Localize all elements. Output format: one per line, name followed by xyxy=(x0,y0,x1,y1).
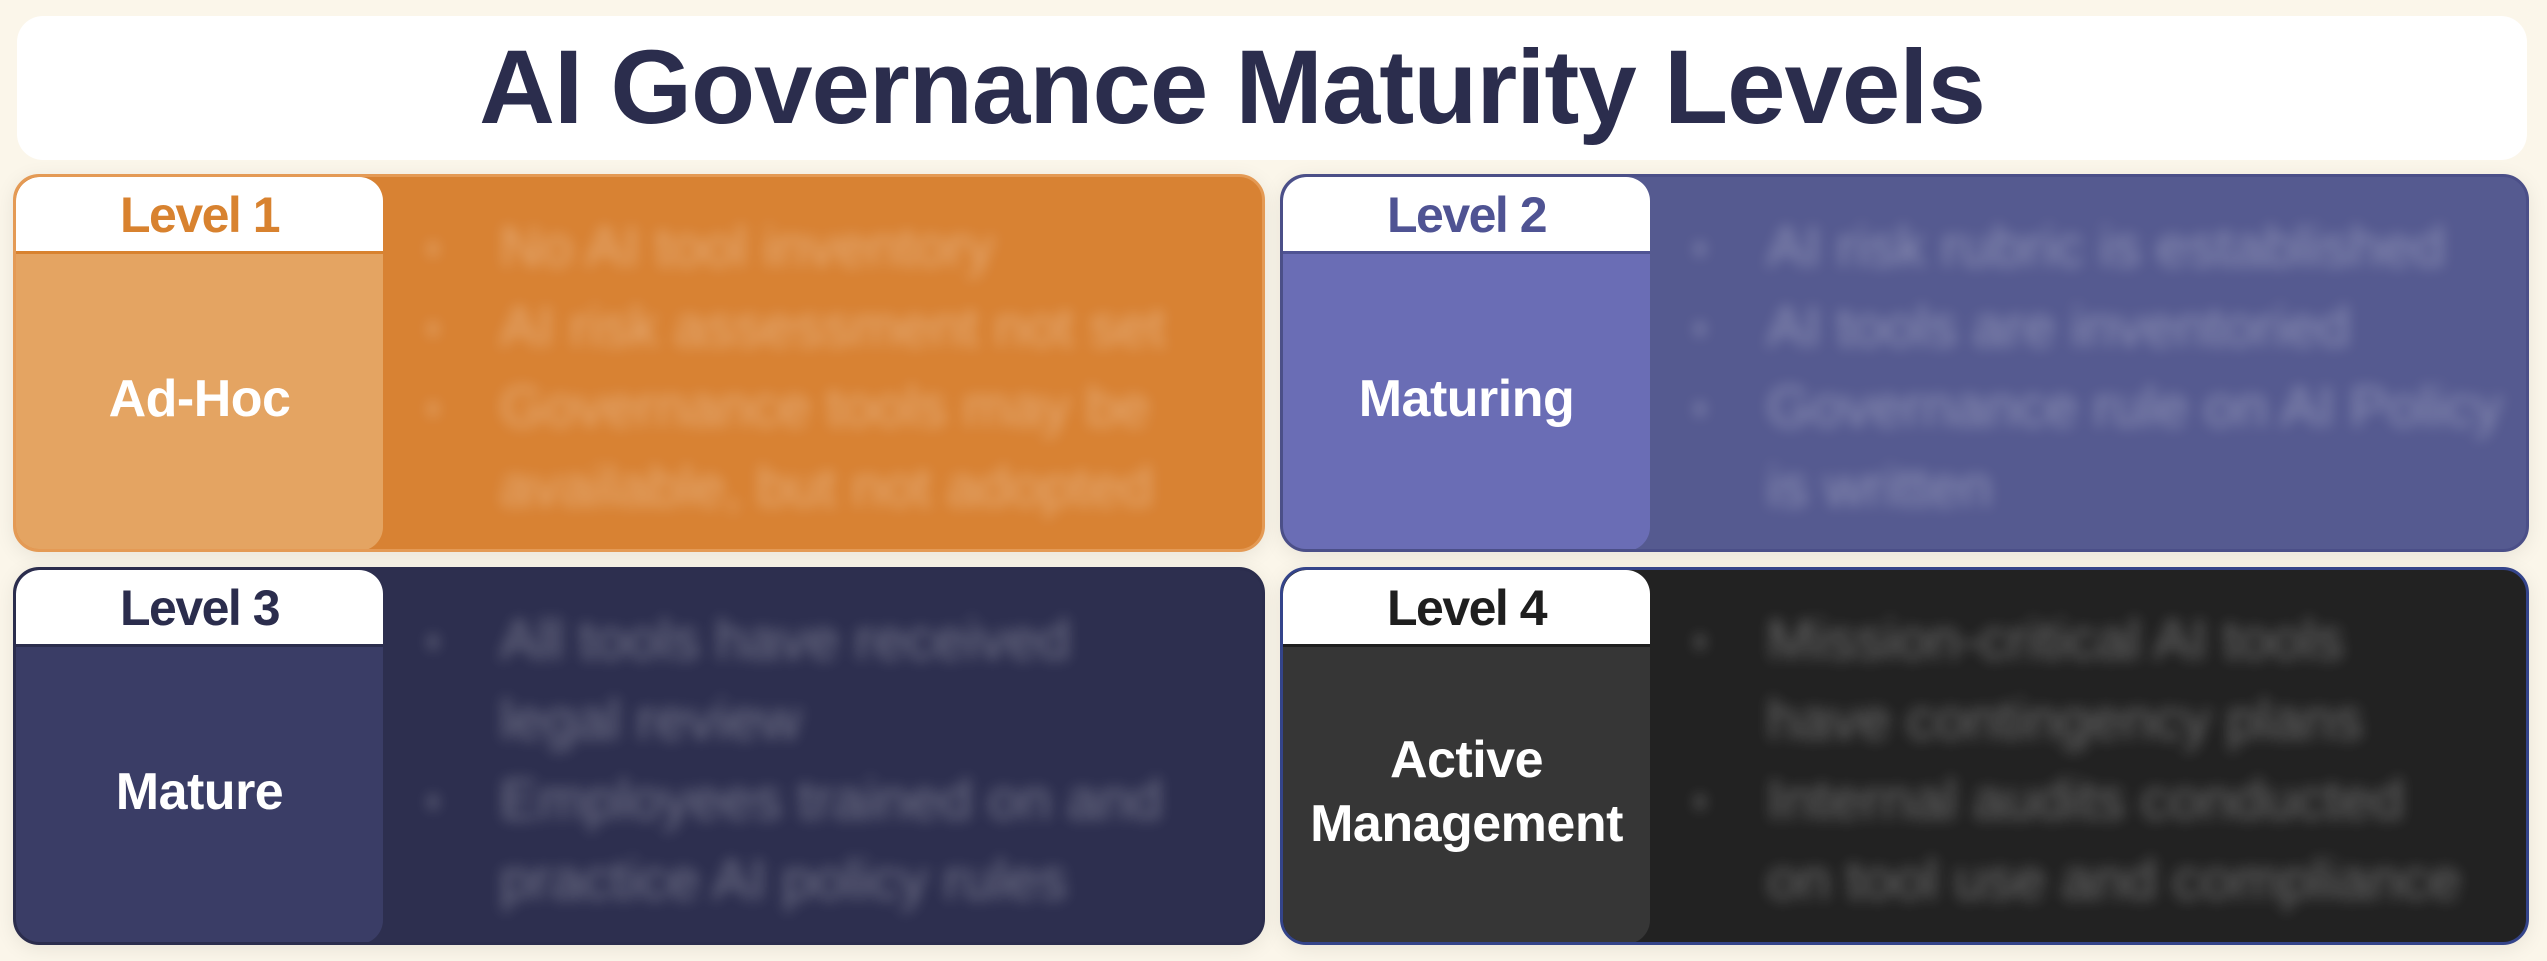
tab: level 1 ad-hoc: Ad-Hoc xyxy=(109,370,290,428)
bullet list: level 4: on tool use and compliance xyxy=(1767,848,2461,912)
bullet list: level 1: No AI tool inventory xyxy=(500,215,994,279)
bullet list: level 1: available, but not adopted xyxy=(500,455,1153,519)
bullet list: level 2: Governance rule on AI Policy xyxy=(1767,375,2502,439)
panel: level 1 xyxy=(13,174,1265,552)
panel: level 3 xyxy=(13,567,1265,945)
bullet list: level 3: practice AI policy rules xyxy=(500,848,1067,912)
tab: level 4 active management: Level 4 xyxy=(1387,580,1546,636)
bullet list: level 4 xyxy=(1691,608,2463,912)
bullet list: level 1: Governance tools may be xyxy=(500,375,1150,439)
tab: level 2 maturing: Level 2 xyxy=(1387,187,1546,243)
bullet list: level 4: Internal audits conducted xyxy=(1767,768,2404,832)
tab: level 1 ad-hoc xyxy=(16,177,383,551)
panel: level 4 xyxy=(1280,567,2529,945)
tab: level 4 active management: Management xyxy=(1310,794,1623,852)
bullet list: level 3: All tools have received xyxy=(500,608,1070,672)
tab: level 3 mature xyxy=(16,570,383,944)
panel: level 2 xyxy=(1280,174,2529,552)
title: AI Governance Maturity Levels xyxy=(479,29,1985,146)
tab: level 3 mature: Level 3 xyxy=(120,580,279,636)
tab: level 4 active management: Active xyxy=(1390,730,1543,788)
bullet list: level 1: AI risk assessment not set xyxy=(500,295,1165,359)
tab: level 2 maturing xyxy=(1283,177,1650,551)
title xyxy=(17,16,2527,160)
bullet list: level 4: have contingency plans xyxy=(1767,688,2363,752)
tab: level 1 ad-hoc: Level 1 xyxy=(120,187,279,243)
bullet list: level 2 xyxy=(1693,215,2502,519)
tab: level 3 mature: Mature xyxy=(116,762,283,820)
tab: level 2 maturing: Maturing xyxy=(1359,370,1574,428)
bullet list: level 3 xyxy=(424,608,1166,914)
bullet list: level 4: Mission-critical AI tools xyxy=(1767,608,2344,672)
tab: level 4 active management xyxy=(1283,570,1650,944)
bullet list: level 1 xyxy=(425,215,1167,519)
bullet list: level 3: legal review xyxy=(500,688,801,752)
bullet list: level 2: is written xyxy=(1767,455,1992,519)
bullet list: level 3: Employees trained on and xyxy=(500,768,1162,832)
bullet list: level 2: AI tools are inventoried xyxy=(1767,295,2350,359)
bullet list: level 2: AI risk rubric is established xyxy=(1767,215,2445,279)
